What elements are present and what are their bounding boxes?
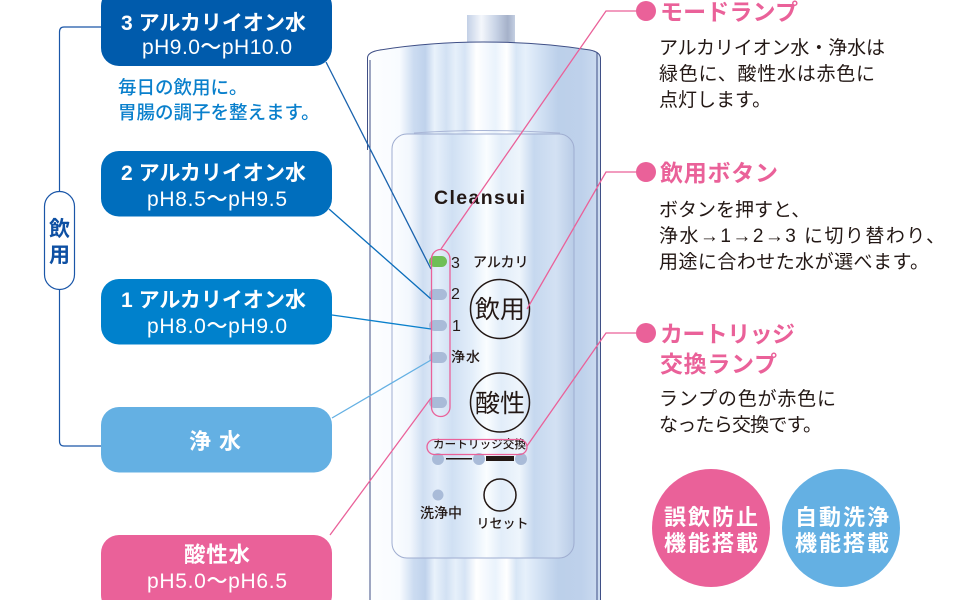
logo: Cleansui: [434, 187, 525, 209]
note: daily drinking: 毎日の飲用に。: [118, 77, 248, 98]
lamp: acidic: [429, 397, 447, 408]
box: purified water: [101, 407, 332, 472]
cartridge indicator: カートリッジ交換: [433, 437, 526, 451]
callout: drinking button: 飲用ボタン: [660, 160, 778, 186]
lamp: alkali 2: [429, 289, 447, 300]
badge: auto cleaning: 自動洗浄: [795, 505, 889, 530]
lamp labels: アルカリ: [473, 254, 528, 270]
lamp labels: 1: [452, 318, 461, 335]
callout: mode lamp: 点灯します。: [659, 89, 771, 111]
bracket: drinking group: [44, 27, 101, 446]
button: acidic: [470, 373, 530, 432]
callout: cartridge lamp: ランプの色が赤色に: [659, 388, 836, 410]
button: drinking: [470, 280, 530, 338]
lamp labels: 2: [451, 286, 460, 303]
box: acidic water: pH5.0～pH6.5: [147, 570, 287, 593]
drinking label: 用: [49, 244, 70, 267]
callout: drinking button: ボタンを押すと、: [659, 199, 810, 221]
box: alkaline 2: pH8.5～pH9.5: [147, 188, 287, 211]
callout: mode lamp: アルカリイオン水・浄水は: [659, 37, 885, 59]
washing indicator: [420, 490, 462, 521]
lamp: alkali 3 green: [429, 256, 447, 267]
reset button: リセット: [476, 516, 529, 531]
cartridge indicator: [432, 437, 527, 465]
note: daily drinking: 胃腸の調子を整えます。: [118, 102, 320, 123]
lamp: purified: [429, 352, 447, 363]
box: alkaline 1: [101, 279, 332, 344]
box: alkaline 3: 3 アルカリイオン水: [121, 12, 306, 35]
box: acidic water: 酸性水: [184, 543, 250, 567]
callout: drinking button: [636, 160, 945, 273]
box: acidic water: [101, 535, 332, 600]
lamp labels: [451, 254, 528, 365]
control panel: [392, 134, 574, 558]
lamp: alkali 1: [429, 320, 447, 331]
lamp labels: 浄水: [451, 349, 481, 365]
box: alkaline 1: 1 アルカリイオン水: [121, 289, 306, 312]
box: alkaline 2: 2 アルカリイオン水: [121, 162, 306, 185]
box: alkaline 2: [101, 151, 332, 216]
product: water ioniser body: [367, 15, 600, 600]
badge: misdrink prevention: 誤飲防止: [664, 505, 758, 530]
box: purified water: 浄水: [189, 429, 241, 454]
badge: misdrink prevention: [652, 469, 770, 587]
callout: cartridge lamp: なったら交換です。: [659, 414, 822, 436]
box: alkaline 1: pH8.0～pH9.0: [147, 315, 287, 338]
button: acidic: 酸性: [475, 390, 525, 418]
box: alkaline 3: pH9.0～pH10.0: [142, 36, 292, 59]
lamp labels: 3: [451, 255, 460, 272]
drinking label: 飲: [49, 218, 70, 241]
note: daily drinking: [118, 77, 320, 123]
leader lines: [326, 11, 640, 535]
callout: cartridge lamp: カートリッジ: [660, 321, 795, 347]
button: drinking: 飲用: [475, 296, 525, 324]
reset button: [476, 479, 529, 531]
badge: misdrink prevention: 機能搭載: [664, 531, 758, 556]
callout: cartridge lamp: 交換ランプ: [660, 351, 777, 377]
badge: auto cleaning: [782, 469, 900, 587]
callout: mode lamp: [636, 0, 885, 111]
drinking label: [44, 192, 74, 290]
callout: drinking button: 用途に合わせた水が選べます。: [659, 251, 929, 273]
callout: mode lamp: 緑色に、酸性水は赤色に: [659, 63, 875, 85]
box: alkaline 3: [101, 0, 332, 66]
badge: auto cleaning: 機能搭載: [795, 531, 889, 556]
callout: cartridge lamp: [636, 321, 836, 436]
washing indicator: 洗浄中: [420, 505, 462, 521]
callout: drinking button: 浄水→1→2→3 に切り替わり、: [659, 225, 945, 247]
